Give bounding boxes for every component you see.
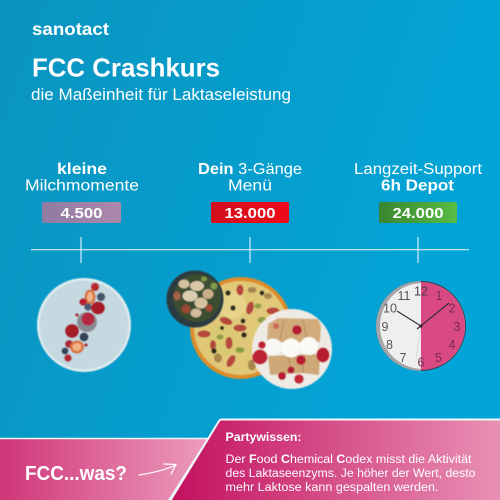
image: clock: 9 [382,320,389,334]
image: clock: 7 [400,351,407,365]
title: FCC Crashkurs [32,52,220,82]
badge: 4.500 [42,202,121,223]
image: clock: 6 [418,356,425,370]
panel: Partywissen: Partywissen: [226,432,302,444]
label: kleine Milchmomente: kleine [57,161,107,178]
image: clock: 11 [398,289,411,303]
panel: FCC...was?: FCC...was? [25,463,127,485]
image: pizza [190,277,292,379]
label: Dein 3-Gänge Menü: Dein 3-Gänge [198,161,302,178]
badge: 24.000: 24.000 [392,205,444,222]
image: clock: 5 [435,351,442,365]
image: clock: 4 [449,338,456,352]
image: clock: 2 [449,302,456,316]
label: Langzeit-Support 6h Depot: Langzeit-Support [354,161,483,178]
badge: 13.000: 13.000 [224,205,276,222]
label: Langzeit-Support 6h Depot [354,161,483,194]
image: clock: 8 [386,338,393,352]
label: Langzeit-Support 6h Depot: 6h Depot [381,178,454,194]
label: Dein 3-Gänge Menü [198,161,302,194]
panel: Partywissen: Der Food Chemical Codex misst die Aktivität [226,454,472,466]
image: clock: 10 [383,302,397,316]
label: kleine Milchmomente [25,161,139,194]
image: clock: 12 [414,284,428,298]
arrow [139,464,176,475]
panel: FCC...was? [0,438,208,500]
label: Dein 3-Gänge Menü: Menü [228,178,272,194]
badge: 4.500: 4.500 [60,205,102,222]
image: clock [376,280,467,372]
timeline [31,237,469,263]
image: clock: 3 [454,320,461,334]
panel: Partywissen: mehr Laktose kann gespalten werden. [226,482,438,494]
image: plate with berries [37,278,131,372]
logo: sanotact: sanotact [32,19,109,39]
badge: 24.000 [379,202,457,223]
image: crepes plate [252,309,332,389]
subtitle: die Maßeinheit für Laktaseleistung [31,86,291,104]
panel: Partywissen [167,420,500,500]
label: kleine Milchmomente: Milchmomente [25,178,139,194]
image: salad bowl [166,270,224,328]
badge: 13.000 [211,202,289,223]
panel: Partywissen: des Laktaseenzyms. Je höher der Wert, desto [226,468,476,480]
image: clock: 1 [436,289,443,303]
